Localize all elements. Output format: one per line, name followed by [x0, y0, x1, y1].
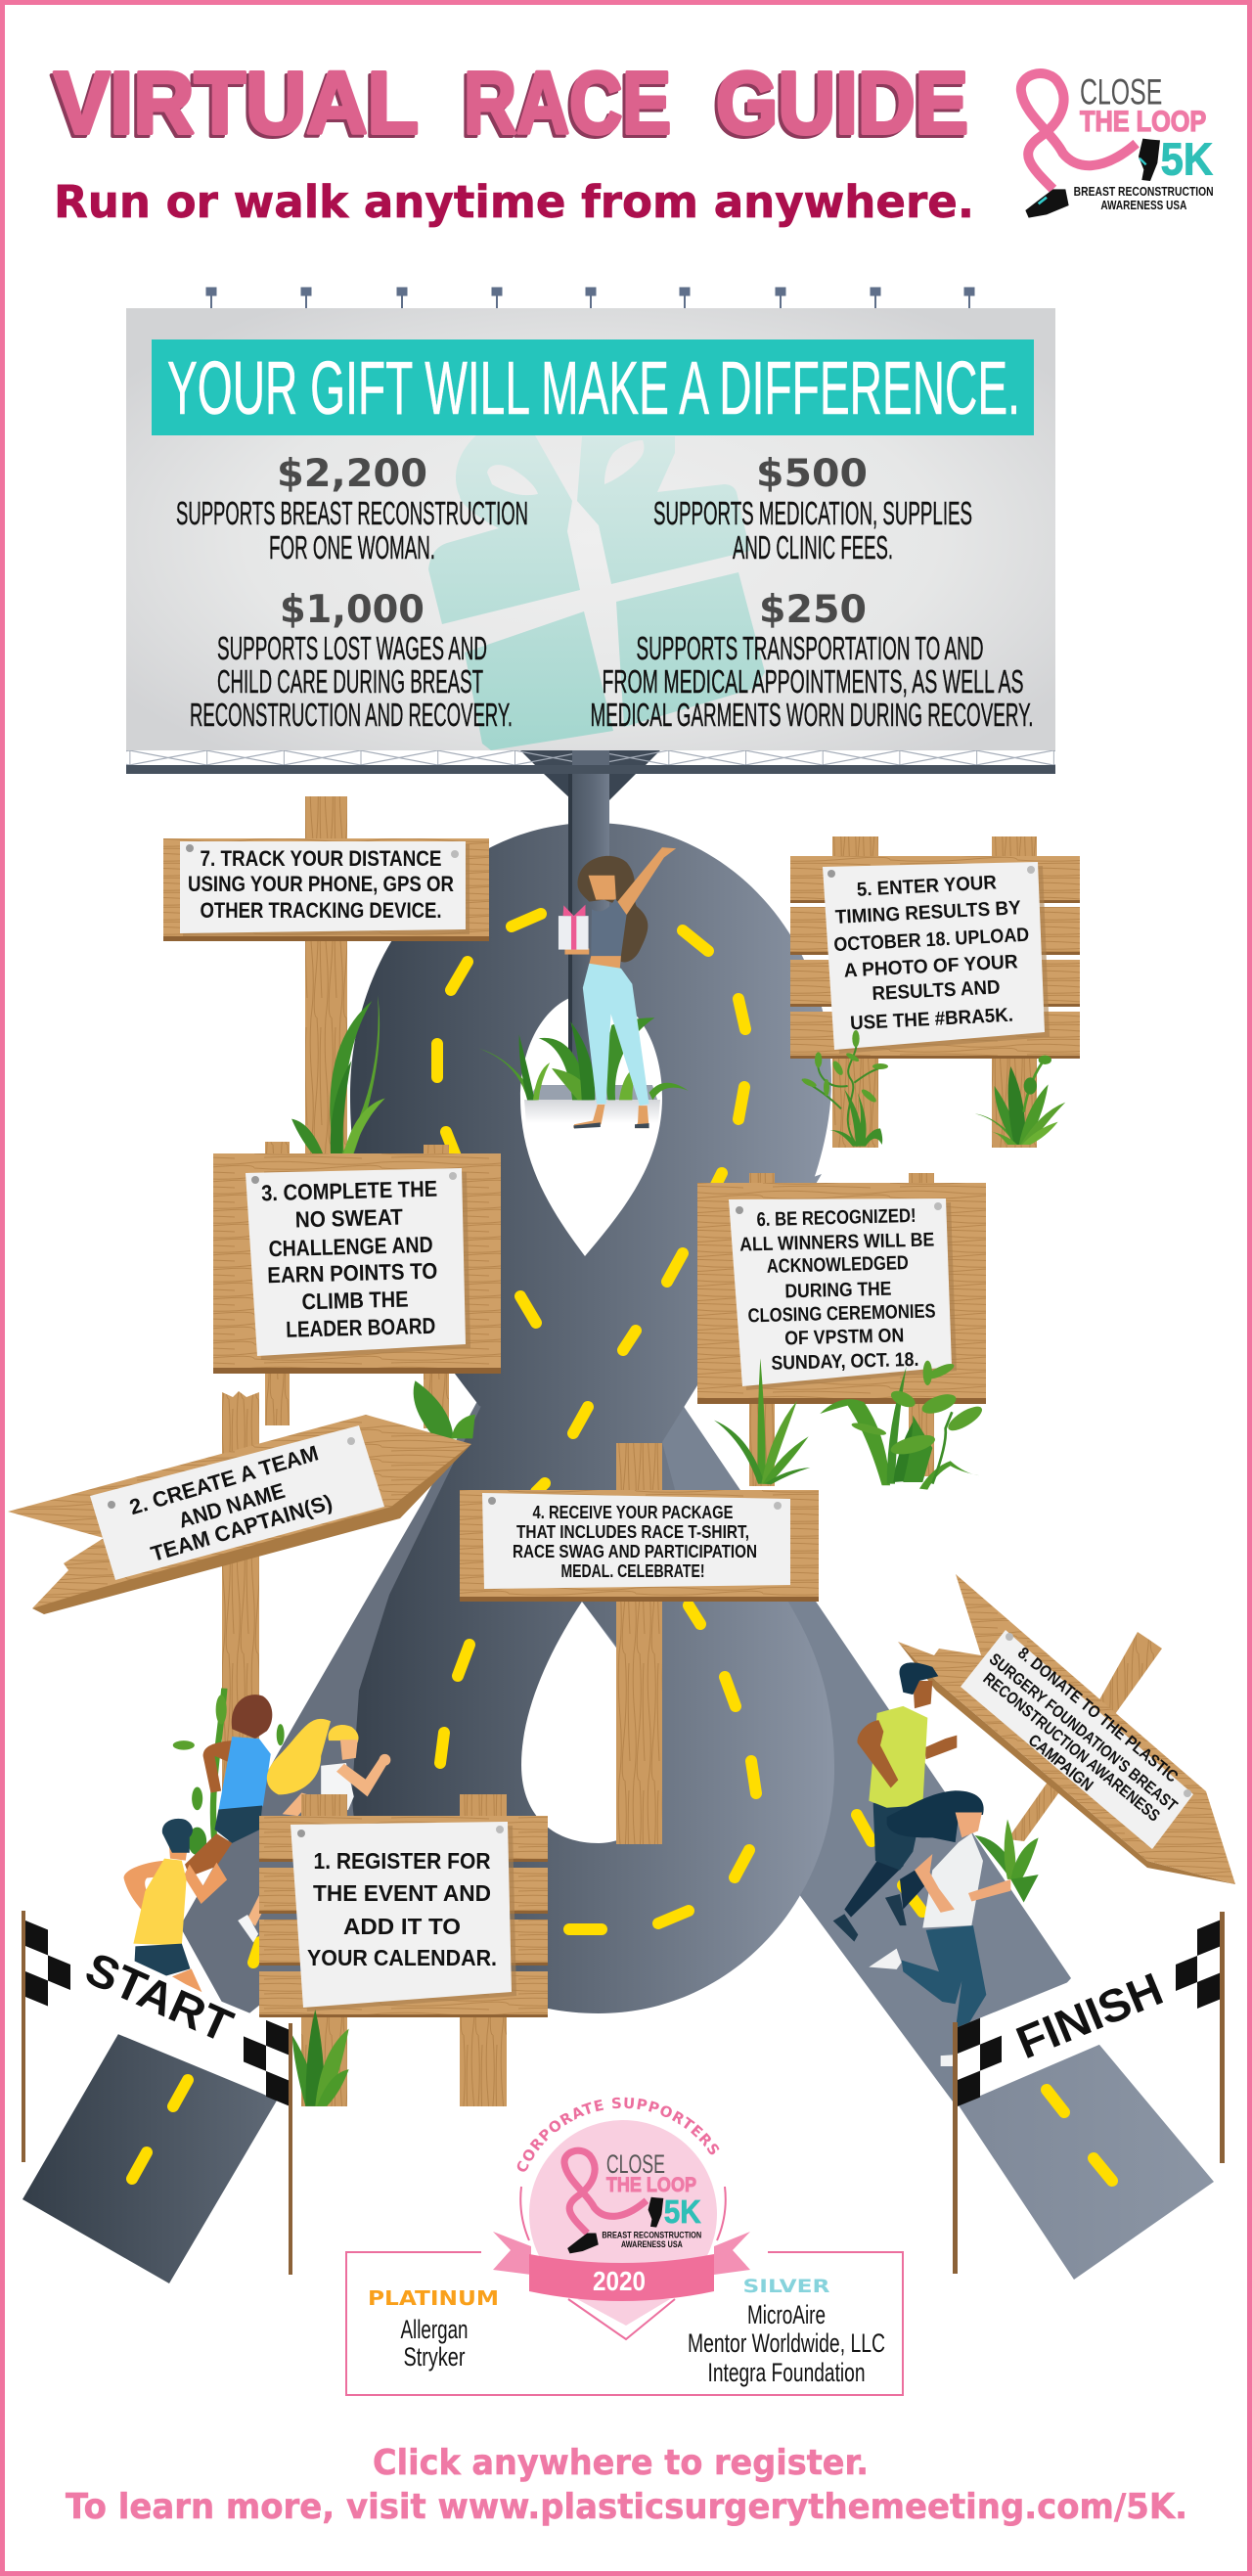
sign 8: RECONSTRUCTION AWARENESS [979, 1669, 1164, 1826]
donation $2,200: FOR ONE WOMAN. [269, 529, 435, 565]
runner with blonde ponytail [238, 1719, 390, 1942]
platinum list: Allergan [401, 2315, 468, 2344]
billboard pole [544, 774, 636, 1097]
plants at sign 6 [714, 1358, 985, 1490]
sign 3: EARN POINTS TO [267, 1258, 438, 1288]
donation $250: SUPPORTS TRANSPORTATION TO AND [636, 630, 984, 666]
donation $500: $500 [756, 452, 868, 496]
sign 6: CLOSING CEREMONIES [747, 1300, 936, 1327]
badge logo: THE LOOP [606, 2173, 696, 2196]
platinum list: PLATINUM [368, 2286, 499, 2310]
tank top [591, 899, 627, 956]
sign 6: ALL WINNERS WILL BE [739, 1229, 934, 1256]
feet [573, 1105, 649, 1128]
subtitle: Run or walk anytime from anywhere. [54, 176, 974, 228]
sign 2: 2. CREATE A TEAM [126, 1440, 321, 1519]
sign 6: SUNDAY, OCT. 18. [771, 1349, 919, 1375]
road: finish strip [582, 1393, 1071, 2105]
sign 7: USING YOUR PHONE, GPS OR [188, 872, 454, 896]
donation $2,200 [176, 452, 528, 565]
donation $1,000: CHILD CARE DURING BREAST [217, 663, 483, 700]
platinum list [368, 2286, 499, 2372]
badge logo: BREAST RECONSTRUCTION [602, 2230, 701, 2240]
sign 6 [697, 1173, 986, 1486]
sign 1: 1. REGISTER FOR [313, 1848, 491, 1874]
corporate supporters box [346, 2252, 903, 2395]
raised arm [616, 847, 676, 915]
sign 5: A PHOTO OF YOUR [843, 951, 1019, 982]
silver list [688, 2276, 885, 2387]
badge ribbon [493, 2232, 750, 2301]
hair back [577, 856, 648, 962]
runner in blue tank [185, 1695, 272, 1876]
title: RACE [461, 58, 668, 156]
donation $500: AND CLINIC FEES. [733, 529, 893, 565]
midriff [589, 956, 621, 969]
leggings [583, 964, 649, 1106]
logo: close the loop 5k: CLOSE [1080, 71, 1162, 113]
woman holding gift [559, 847, 676, 1129]
finish road segment [959, 2033, 1214, 2280]
sign 4: THAT INCLUDES RACE T-SHIRT, [516, 1522, 749, 1542]
sign 3: LEADER BOARD [286, 1313, 436, 1342]
donation $1,000 [190, 588, 513, 733]
silver list: MicroAire [747, 2300, 826, 2329]
silver list: Integra Foundation [708, 2358, 865, 2387]
left runners [124, 1695, 390, 1992]
right fern [975, 1056, 1065, 1145]
finish banner [953, 1912, 1225, 2274]
sign 3 [213, 1142, 501, 1428]
sign 6: DURING THE [784, 1279, 892, 1302]
sign 1: ADD IT TO [343, 1914, 461, 1939]
call to action: To learn more, visit www.plasticsurgerythemeeting.com/5K. [66, 2487, 1187, 2527]
runner in lime shirt [833, 1662, 957, 1942]
right runners [833, 1662, 1010, 2066]
sign 7: OTHER TRACKING DEVICE. [200, 898, 442, 923]
billboard truss [126, 750, 1055, 774]
road: centre line dashes [253, 914, 922, 1963]
sign 3: NO SWEAT [295, 1204, 403, 1232]
sign 2 [8, 1391, 471, 1790]
sign 6: 6. BE RECOGNIZED! [756, 1205, 917, 1231]
call to action: Click anywhere to register. [373, 2443, 869, 2483]
logo: close the loop 5k: AWARENESS USA [1100, 198, 1187, 212]
billboard lamps [206, 288, 974, 308]
plants at sign 5 [801, 1030, 1065, 1147]
sign 1: YOUR CALENDAR. [307, 1945, 497, 1970]
silver list: Mentor Worldwide, LLC [688, 2328, 885, 2358]
title: VIRTUAL [51, 58, 416, 156]
sign 2: AND NAME [176, 1478, 288, 1533]
sign 3: CLIMB THE [301, 1286, 409, 1314]
silver list: SILVER [743, 2276, 830, 2297]
left vine and grass [801, 1030, 888, 1147]
road: upper loop [350, 823, 831, 1438]
start banner [22, 1911, 292, 2275]
plant behind arrow sign 2 [414, 1380, 475, 1438]
donation $2,200: $2,200 [277, 452, 427, 496]
runner in white top [869, 1790, 1010, 2066]
title [51, 55, 968, 156]
sign 4: RACE SWAG AND PARTICIPATION [513, 1542, 757, 1561]
sign 4: 4. RECEIVE YOUR PACKAGE [532, 1503, 734, 1522]
donation $500: SUPPORTS MEDICATION, SUPPLIES [653, 495, 972, 531]
donation $1,000: $1,000 [280, 588, 425, 632]
title: GUIDE [713, 58, 965, 156]
broad leaf plant [820, 1361, 985, 1490]
donation $250 [591, 588, 1033, 733]
badge logo: CLOSE [606, 2149, 665, 2179]
badge logo: 5K [664, 2194, 701, 2231]
plants in the loop [478, 1017, 689, 1100]
gift box [564, 948, 589, 955]
sign 5 [790, 836, 1080, 1148]
logo: close the loop 5k: 5K [1161, 133, 1213, 184]
sign 6: ACKNOWLEDGED [767, 1252, 909, 1278]
corporate supporters badge: CORPORATE SUPPORTERS [516, 2098, 720, 2172]
sign 8: 8. DONATE TO THE PLASTIC [1014, 1644, 1182, 1786]
sign 5: OCTOBER 18. UPLOAD [833, 925, 1030, 956]
runner in yellow tank [124, 1819, 227, 1992]
sign 3: CHALLENGE AND [268, 1232, 433, 1261]
platinum list: Stryker [403, 2342, 466, 2372]
title: VIRTUAL [54, 55, 419, 153]
sign 1 [259, 1794, 548, 2106]
call to action [66, 2443, 1187, 2527]
sign 7 [163, 796, 489, 1158]
sign 7: 7. TRACK YOUR DISTANCE [200, 846, 442, 871]
billboard face [126, 308, 1055, 750]
donation $250: $250 [759, 588, 867, 632]
donation $2,200: SUPPORTS BREAST RECONSTRUCTION [176, 495, 528, 531]
corporate supporters badge [493, 2098, 750, 2340]
sign 5: TIMING RESULTS BY [834, 897, 1022, 928]
sign 2: TEAM CAPTAIN(S) [148, 1490, 335, 1566]
logo: close the loop 5k: BREAST RECONSTRUCTION [1074, 184, 1214, 199]
road: crossing band and lower loop [352, 1174, 834, 2013]
donation $500 [653, 452, 972, 565]
plant at sign 1 [292, 2010, 349, 2106]
badge ribbon: 2020 [593, 2266, 646, 2296]
sign 5: 5. ENTER YOUR [856, 872, 998, 901]
sign 1: THE EVENT AND [313, 1880, 491, 1906]
plant behind finishing runner [975, 1820, 1039, 1902]
finish banner: FINISH [1009, 1963, 1170, 2068]
road: start strip [180, 1257, 587, 2025]
ground under woman [524, 1085, 660, 1123]
sign 8 [898, 1574, 1235, 1884]
sign 8: SURGERY FOUNDATION'S BREAST [986, 1650, 1182, 1816]
gift watermark [428, 435, 765, 750]
title: RACE [464, 55, 671, 153]
sign 5: USE THE #BRA5K. [850, 1005, 1013, 1034]
tall grass [714, 1358, 810, 1484]
donation $1,000: SUPPORTS LOST WAGES AND [217, 630, 487, 666]
sign 6: OF VPSTM ON [784, 1325, 904, 1349]
start road segment [22, 2027, 277, 2283]
vine behind left runners [173, 1689, 285, 1857]
sign 3: 3. COMPLETE THE [261, 1176, 437, 1205]
donation $1,000: RECONSTRUCTION AND RECOVERY. [190, 697, 513, 733]
start banner: START [78, 1942, 241, 2053]
sign 4 [460, 1443, 819, 1844]
badge logo: AWARENESS USA [621, 2239, 683, 2250]
face [589, 876, 616, 900]
title: GUIDE [716, 55, 968, 153]
sign 4: MEDAL. CELEBRATE! [561, 1561, 704, 1581]
sign 8: CAMPAIGN [1025, 1731, 1096, 1795]
logo: close the loop 5k [1021, 71, 1214, 218]
billboard [126, 288, 1055, 1097]
sign 5: RESULTS AND [872, 976, 1001, 1005]
badge logo [564, 2149, 701, 2253]
logo: close the loop 5k: THE LOOP [1080, 106, 1206, 138]
plant in front of sign 7 post [291, 995, 385, 1160]
